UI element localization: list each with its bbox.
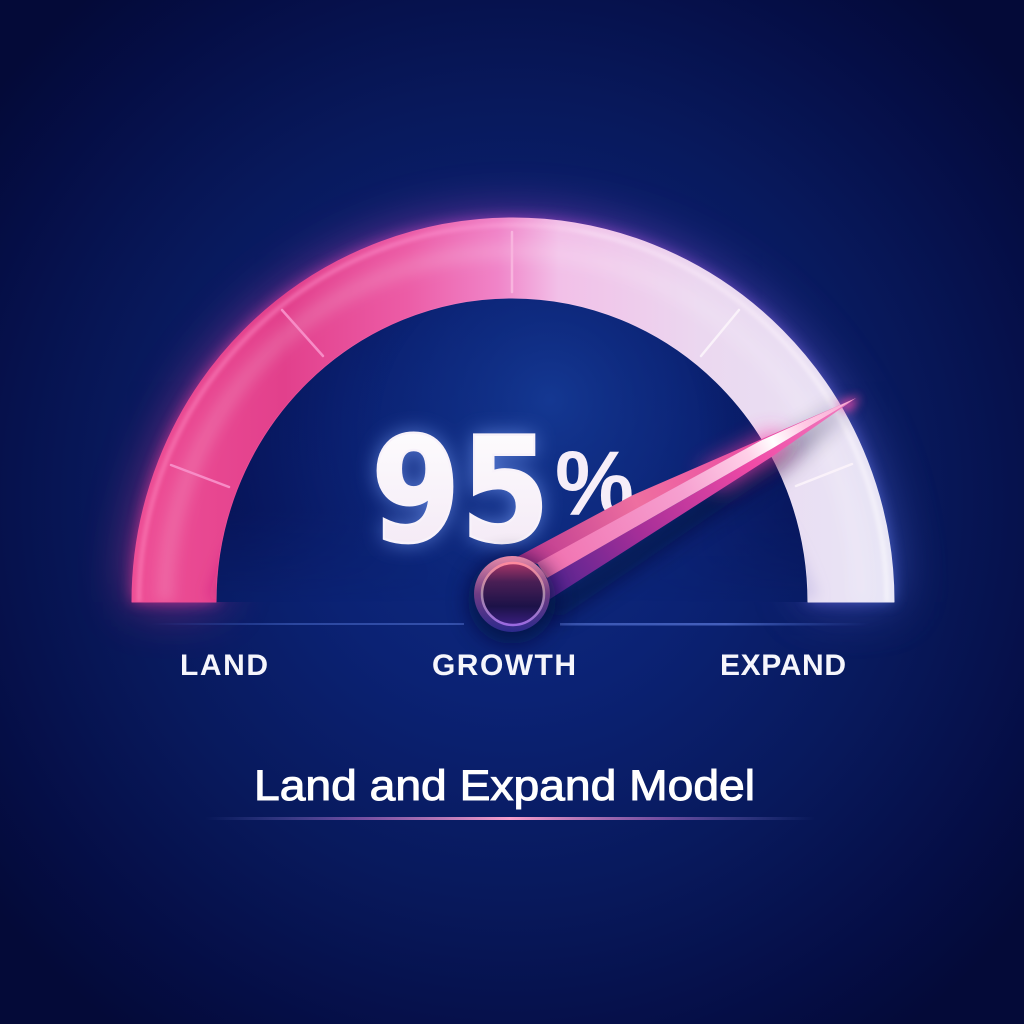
value: 95%: 95 [371,406,550,576]
inner dial shading [220,364,800,559]
value: 95%: 95 [371,406,550,576]
horizontal baseline [150,623,870,626]
label: expand: EXPAND [720,649,846,682]
axis labels [180,649,846,682]
label: growth: GROWTH [432,649,576,682]
title: Land and Expand Model [254,762,755,810]
inner dial glow [350,200,750,600]
value: 95%: % [555,433,634,535]
needle [517,396,860,618]
tick marks [171,232,852,487]
title underline [205,817,815,820]
label: land: LAND [180,649,268,682]
needle hub [468,556,556,644]
gauge arc [132,218,894,602]
